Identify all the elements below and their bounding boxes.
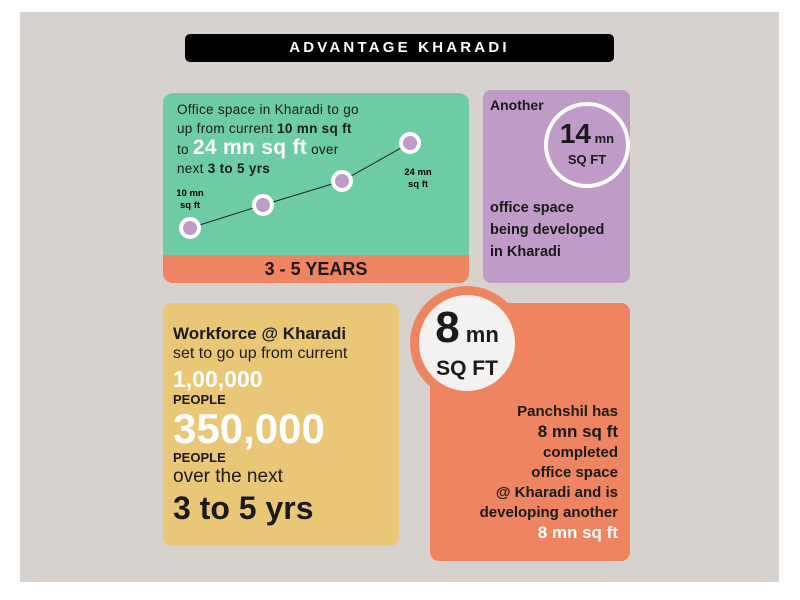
text block: growth description: Office space in Kharadi to go [177,102,359,117]
title: ADVANTAGE KHARADI [289,39,510,56]
text block: workforce: set to go up from current [173,345,347,362]
title [185,34,614,62]
text block: 8 mn sq ft [538,422,618,441]
panel: Panchshil 8 mn [430,303,630,561]
text block: growth description [177,102,359,176]
circle badge: 14 mn [560,118,614,149]
text block [490,200,604,260]
text block: completed [543,444,618,461]
text block: 8 mn sq ft [538,523,618,542]
panel: 14 mn sq ft [483,90,630,283]
circle badge [544,102,630,188]
circle badge: SQ FT [568,152,606,167]
text block: workforce: 350,000 [173,405,325,452]
text block: workforce: over the next [173,466,283,487]
line chart: 24 mn [404,167,432,178]
text block: workforce: PEOPLE [173,392,226,407]
panel: workforce [163,303,399,546]
text block: in Kharadi [490,244,561,260]
text block: workforce: Workforce @ Kharadi [173,324,346,343]
text block: growth description: next 3 to 5 yrs [177,161,270,176]
text block [480,403,618,542]
time strip [163,255,469,283]
circle badge: 8 mn sq ft [410,286,524,400]
text block: being developed [490,222,604,238]
line chart [176,132,432,239]
line chart: sq ft [408,179,429,190]
text block: workforce: PEOPLE [173,450,226,465]
text block: growth description: up from current 10 mn sq ft [177,121,352,136]
text block: growth description: to 24 mn sq ft over [177,136,339,159]
text block: office space [531,464,618,481]
time strip: 3 - 5 YEARS [265,259,367,279]
circle badge: 8 mn sq ft: 8 mn [435,303,499,352]
text block: @ Kharadi and is [496,484,618,501]
text block: developing another [480,504,618,521]
heading: Another: Another [490,97,544,113]
text block: workforce: 3 to 5 yrs [173,490,314,526]
text block: office space [490,200,574,216]
text block: Panchshil has [517,403,618,420]
text block: workforce [173,324,348,526]
line chart: 10 mn [176,188,204,199]
circle badge: 8 mn sq ft: SQ FT [436,357,498,380]
line chart: sq ft [180,200,201,211]
panel: office space growth [163,93,469,283]
text block: workforce: 1,00,000 [173,366,263,392]
